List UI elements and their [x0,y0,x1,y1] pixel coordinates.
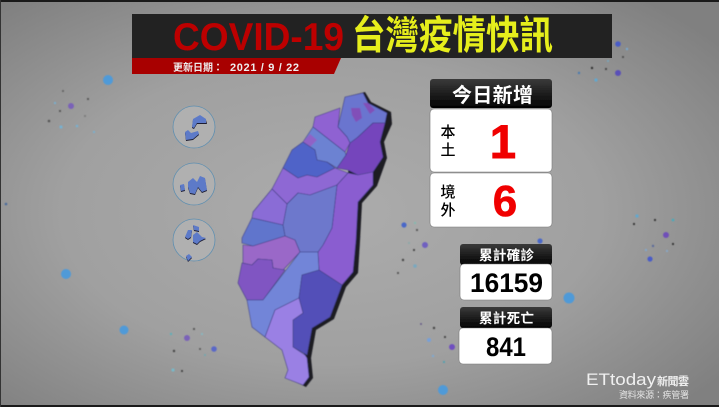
heading: today's new: 今日新增 [452,83,533,107]
card: imported: 外 [440,202,456,219]
title banner [132,14,612,59]
source note: 資料來源：疾管署 [619,389,689,400]
logo: ETtoday: 新聞雲 [657,374,689,388]
map: main island of Taiwan [238,92,392,387]
region: Keelung [363,103,375,114]
region: Changhua [252,189,287,225]
card: domestic [430,109,552,172]
region: Taoyuan [313,108,350,152]
region: Hualien [318,172,373,285]
card: imported [430,173,552,227]
region: Hsinchu [303,127,346,168]
panel: cumulative confirmed: 累計確診 [479,247,534,263]
region: Taichung [272,168,348,204]
title: Taiwan epidemic news: 台灣疫情快訊 [352,15,553,58]
logo: ETtoday [586,370,689,389]
card: domestic: 本 [440,124,456,141]
panel: cumulative confirmed [460,244,552,300]
update date ribbon [132,58,341,74]
card: imported: 境 [440,183,456,201]
region: Hsinchu City [303,134,317,147]
map shadow [286,92,392,387]
region: Chiayi [243,236,300,270]
panel: cumulative deaths [459,307,552,364]
inset: outlying island 3 [173,219,215,262]
region: Nantou [283,185,337,252]
card: domestic: 土 [440,142,456,159]
panel: today's new cases [430,79,552,227]
region: Kaohsiung [247,252,319,337]
region: Pingtung [265,298,309,385]
panel: cumulative confirmed: 16159 [470,268,543,298]
panel: cumulative deaths: 累計死亡 [479,310,534,326]
region: Yilan [337,123,385,175]
region: Taipei [351,108,362,122]
update date ribbon: 2021 / 9 / 22 [230,62,299,74]
update date ribbon: 更新日期： [173,61,223,74]
region: Tainan [238,259,285,300]
inset: outlying island 2 [173,163,215,205]
region: Yunlin [242,218,285,246]
card: domestic: 1 [490,115,516,168]
region: Miaoli [283,142,335,178]
region: New Taipei [338,93,387,145]
panel: cumulative deaths: 841 [486,332,526,362]
title: COVID-19: COVID-19 [173,16,344,59]
inset: outlying island 1 [173,106,215,148]
card: imported: 6 [493,177,517,226]
region: Taitung [293,270,342,355]
logo: ETtoday: ETtoday [586,370,657,389]
heading: today's new [430,79,552,108]
